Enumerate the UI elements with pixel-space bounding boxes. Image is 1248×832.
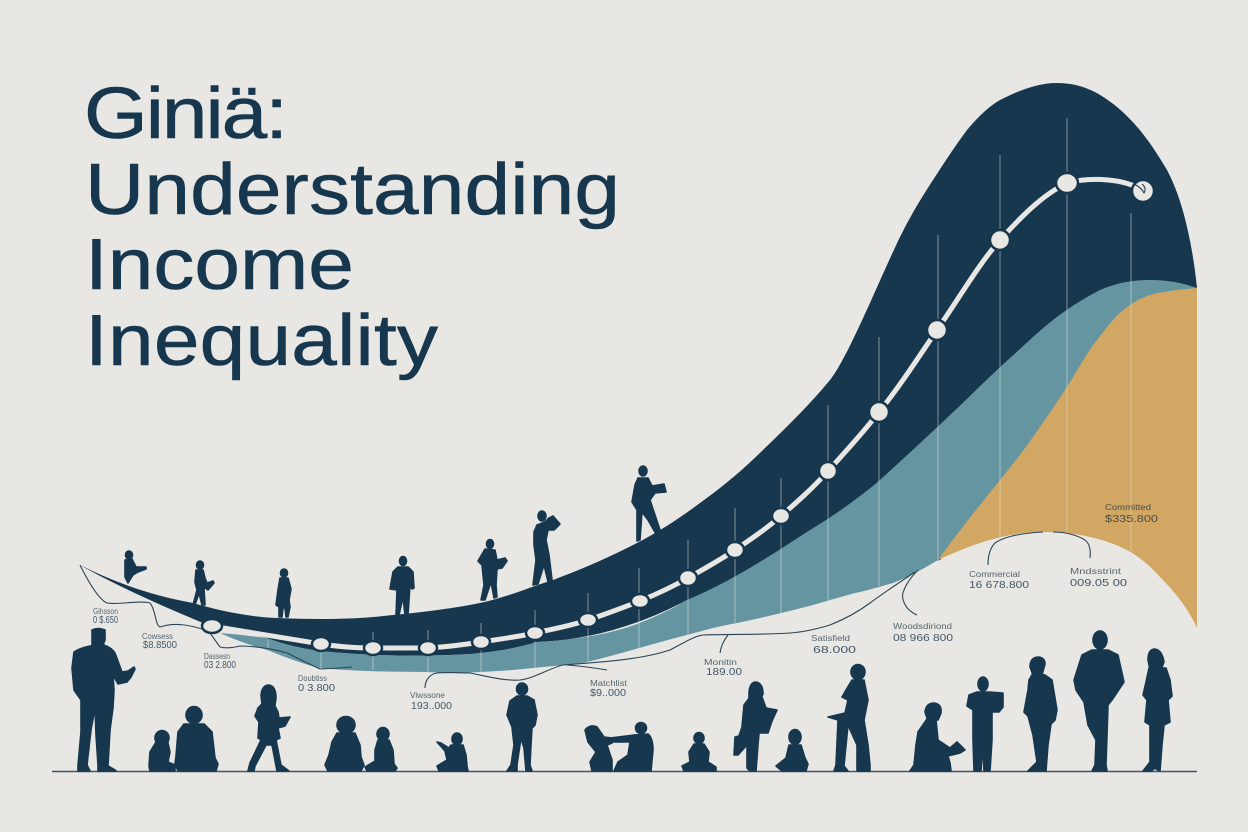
data labels	[93, 503, 1159, 712]
label 6	[590, 679, 628, 699]
figure: seated girl	[776, 730, 808, 771]
figure: standing woman gesturing	[828, 664, 870, 771]
label 2: Cowsess	[142, 632, 173, 641]
label 5	[410, 691, 452, 712]
figure: seated curly hair	[325, 716, 364, 771]
vertical income markers	[268, 118, 1131, 672]
figure: man in profile	[1024, 657, 1057, 771]
figure: standing woman	[1143, 649, 1172, 771]
label 5: 193..000	[411, 701, 452, 712]
figure: two people stretching	[585, 722, 653, 771]
figure: tall man	[1074, 631, 1124, 771]
figure: seated adult	[175, 706, 218, 771]
figure: seated pointing	[437, 733, 468, 771]
label 5: Viwssone	[410, 691, 446, 700]
figure: seated child with hair	[365, 728, 397, 771]
label 3: Dassesn	[204, 652, 230, 661]
label 7: Monitin	[704, 658, 737, 667]
people climbing the curve	[125, 466, 666, 617]
label 9: Woodsdiriond	[893, 622, 952, 631]
figure: seated on curve	[125, 551, 146, 583]
label 1	[93, 607, 118, 626]
label 10: 16 678.800	[969, 580, 1030, 591]
figure: standing man	[72, 628, 135, 771]
label 12	[1105, 503, 1159, 525]
title: Understanding	[85, 150, 620, 230]
figure: woman on curve	[276, 569, 291, 617]
label 11	[1070, 567, 1128, 589]
label 2	[142, 632, 177, 651]
figure: woman with bag and case	[734, 682, 777, 771]
label 10: Commercial	[969, 570, 1020, 579]
area: gold top share band	[938, 288, 1197, 628]
label 12: Committed	[1105, 503, 1151, 512]
label 8: Satisfield	[811, 634, 850, 643]
title	[84, 74, 620, 381]
label 7: 189.00	[706, 667, 743, 678]
figure: walking with object	[193, 561, 214, 605]
label 11: Mndsstrint	[1070, 567, 1122, 576]
label 8	[811, 634, 857, 656]
area: teal middle income band	[220, 280, 1197, 673]
figure: climbing reading	[533, 511, 560, 585]
label 3	[204, 652, 236, 671]
figure: walking woman	[248, 685, 290, 771]
label 1: 0 $.650	[93, 615, 118, 626]
area: navy top income band	[80, 83, 1197, 656]
label 4: Doubtiss	[298, 674, 327, 683]
title: Income	[85, 225, 354, 305]
label 4	[298, 674, 335, 694]
connector lines	[80, 532, 1090, 688]
label 11: 009.05 00	[1070, 578, 1128, 589]
label 7	[704, 658, 743, 678]
figure: seated child	[149, 730, 175, 771]
figure: man holding folder	[967, 677, 1003, 771]
figure: kneeling man	[910, 703, 965, 771]
figure: standing man in suit	[507, 683, 537, 771]
label 3: 03 2.800	[204, 660, 236, 671]
figure: climbing with book	[478, 540, 507, 600]
label 10	[969, 570, 1030, 591]
title: Giniä:	[84, 74, 288, 154]
label 9: 08 966 800	[893, 633, 954, 644]
label 9	[893, 622, 954, 644]
label 6: $9..000	[590, 688, 626, 699]
lorenz curve line with nodes	[202, 173, 1154, 655]
ground line	[52, 770, 1197, 772]
figure: man with case	[390, 556, 414, 615]
title: Inequality	[85, 301, 438, 381]
people on the ground	[72, 628, 1172, 771]
label 12: $335.800	[1105, 514, 1159, 525]
figure: child cross-legged	[682, 732, 716, 771]
label 8: 68.000	[813, 645, 857, 656]
label 6: Matchlist	[590, 679, 628, 688]
figure: top climber with arm out	[632, 466, 666, 541]
label 1: Gihsson	[93, 607, 118, 616]
label 2: $8.8500	[143, 640, 177, 651]
label 4: 0 3.800	[298, 683, 335, 694]
chart: layered income curve	[80, 83, 1197, 673]
